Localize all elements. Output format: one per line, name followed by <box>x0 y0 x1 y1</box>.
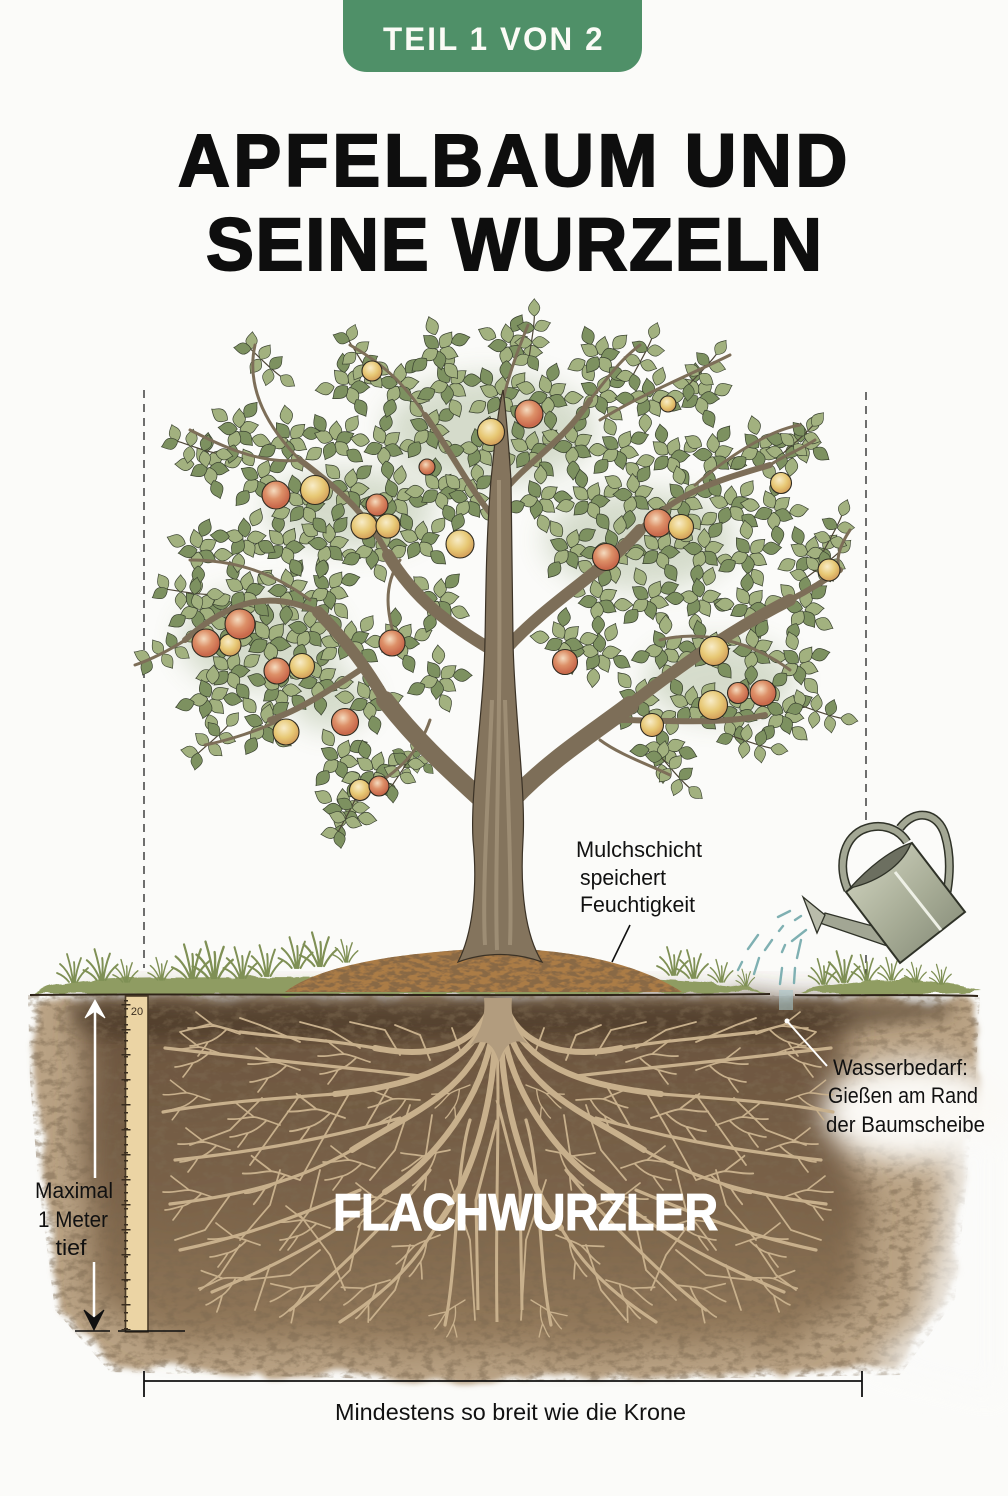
mulch label: Feuchtigkeit <box>580 892 695 917</box>
dashed crown width guides <box>144 390 866 990</box>
mulch label: speichert <box>580 865 666 890</box>
soil main body <box>80 1000 865 1358</box>
apple tree <box>128 294 873 962</box>
width dimension line: Mindestens so breit wie die Krone <box>335 1399 686 1425</box>
white arrow up <box>85 1000 105 1178</box>
right root system <box>501 1012 833 1343</box>
back handle <box>900 815 949 892</box>
can opening <box>850 843 911 888</box>
root crown <box>470 998 528 1062</box>
mulch mound <box>285 948 685 994</box>
centre tap roots <box>476 1045 522 1322</box>
spout rose <box>803 897 825 933</box>
grass turf left <box>30 977 765 995</box>
grass tufts <box>57 932 951 986</box>
apples <box>192 361 840 800</box>
left root system <box>163 1012 495 1343</box>
soil pale watercolor wash <box>36 1000 978 1378</box>
depth label: 1 Meter <box>38 1207 108 1232</box>
title <box>178 120 847 286</box>
width dimension line <box>144 1371 862 1425</box>
depth label: tief <box>56 1235 87 1260</box>
soil dark upper band <box>70 1000 950 1040</box>
can body <box>846 843 965 963</box>
depth arrow with label <box>35 1000 185 1331</box>
roots <box>163 998 833 1343</box>
label text: der Baumscheibe <box>826 1112 985 1137</box>
grass turf right <box>800 980 982 996</box>
outer leafy twigs <box>128 294 873 855</box>
ruler <box>126 996 148 1332</box>
depth label <box>35 1178 113 1260</box>
pale fade on right soil edge <box>865 1130 1000 1400</box>
water label <box>784 1018 985 1137</box>
can highlight <box>895 872 941 930</box>
trunk <box>458 390 542 962</box>
ground dark line <box>30 994 978 996</box>
spout <box>820 913 893 948</box>
watering can <box>738 815 965 1010</box>
ruler: 20 <box>131 1006 143 1018</box>
label: Flachwurzler: FLACHWURZLER <box>333 1184 718 1242</box>
badge: part 1 of 2 <box>343 0 642 72</box>
mulch label: Mulchschicht <box>576 837 702 862</box>
water drops <box>738 911 806 984</box>
ground grass strip <box>30 932 982 996</box>
label text <box>826 1055 985 1137</box>
soil grain texture <box>28 995 980 1385</box>
pale wash behind the water label <box>823 1062 1007 1162</box>
canopy shading <box>180 375 795 730</box>
foliage clusters <box>160 304 849 850</box>
badge: part 1 of 2: TEIL 1 VON 2 <box>383 21 603 57</box>
label text: Wasserbedarf: <box>833 1055 968 1080</box>
depth label: Maximal <box>35 1178 113 1203</box>
mulch label <box>576 837 702 962</box>
water seep <box>779 990 793 1010</box>
soil cross-section <box>28 995 1007 1400</box>
title: SEINE WURZELN <box>206 204 822 286</box>
title: APFELBAUM UND <box>178 120 847 202</box>
trunk bark lines <box>484 480 511 950</box>
arrow down <box>75 1262 185 1331</box>
top handle <box>843 826 907 890</box>
leader <box>784 1018 827 1066</box>
branches <box>135 325 850 800</box>
label text: Gießen am Rand <box>828 1083 978 1108</box>
